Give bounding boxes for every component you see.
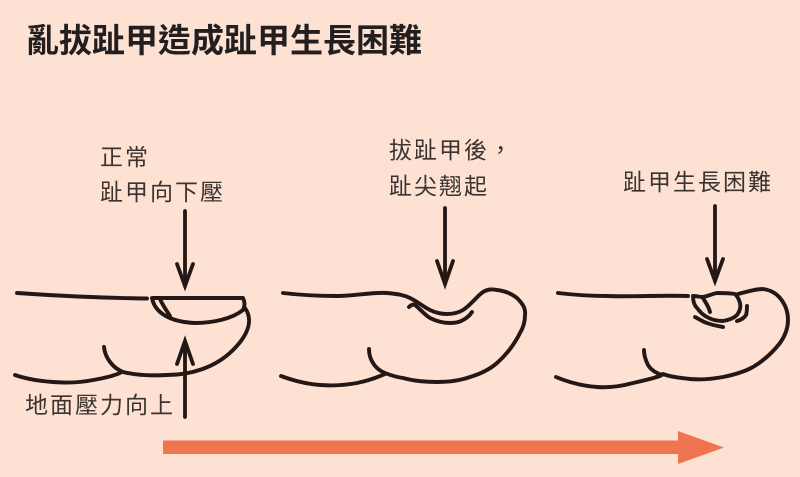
- arrow: toe tip lifted pressure: [437, 208, 453, 284]
- title: 亂拔趾甲造成趾甲生長困難: [26, 22, 422, 59]
- finger: after pulling nail: [281, 289, 525, 385]
- label: normal: 正常: [100, 144, 150, 170]
- label: after pulling nail: [389, 137, 514, 199]
- label: after pulling nail: 趾尖翹起: [389, 173, 489, 199]
- finger: normal: [15, 293, 249, 382]
- label: nail growth difficulty: 趾甲生長困難: [623, 169, 773, 195]
- label: after pulling nail: 拔趾甲後，: [389, 137, 514, 163]
- label: ground pressure upward: 地面壓力向上: [25, 392, 175, 418]
- label: normal: 趾甲向下壓: [100, 179, 225, 205]
- arrow: nail pressing down: [177, 211, 193, 286]
- finger: difficult nail growth: [556, 289, 788, 387]
- arrow: progression: [163, 431, 724, 464]
- arrow: nail pressing into flesh: [707, 206, 723, 281]
- arrow: ground pressure up: [177, 341, 193, 417]
- label: normal: [100, 144, 225, 205]
